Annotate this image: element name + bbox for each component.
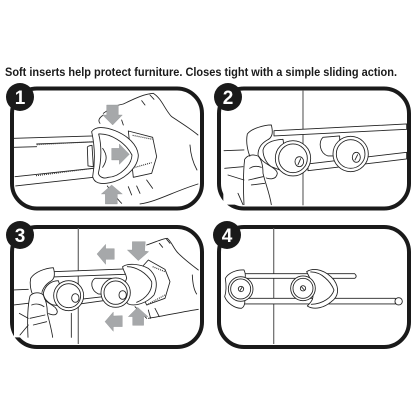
panel 3: slide to close [6,221,202,347]
badge 2 [214,83,242,111]
arrow: push right [112,144,129,164]
panel 2: place on the first knob [214,83,409,208]
badge 2: 2 [223,88,233,109]
arrow: slide left, upper [97,244,114,264]
badge 4 [213,221,241,249]
illustration 1: rail, slider and hand [14,93,198,205]
panel 4: locked result [213,221,409,347]
arrow: slide left, lower [105,312,122,331]
panel frame 3 [12,227,202,347]
panel frame 2 [219,88,409,208]
badge 3: 3 [15,226,25,247]
arrow: press down [127,242,149,261]
illustration 2: knobs and lock [223,91,407,205]
panel 1: squeeze the slider [6,83,202,208]
illustration 4: closed lock on two knobs [225,228,402,344]
badge 1: 1 [15,88,26,109]
panel frame 1 [12,88,202,208]
badge 4: 4 [222,226,233,247]
badge 1 [6,83,34,111]
panel frame 4 [219,227,409,347]
illustration 3: hands closing the lock [14,228,198,344]
arrow: press up [128,307,148,325]
arrow: press up [101,185,122,204]
arrow: press down [103,105,122,125]
badge 3 [6,221,34,249]
